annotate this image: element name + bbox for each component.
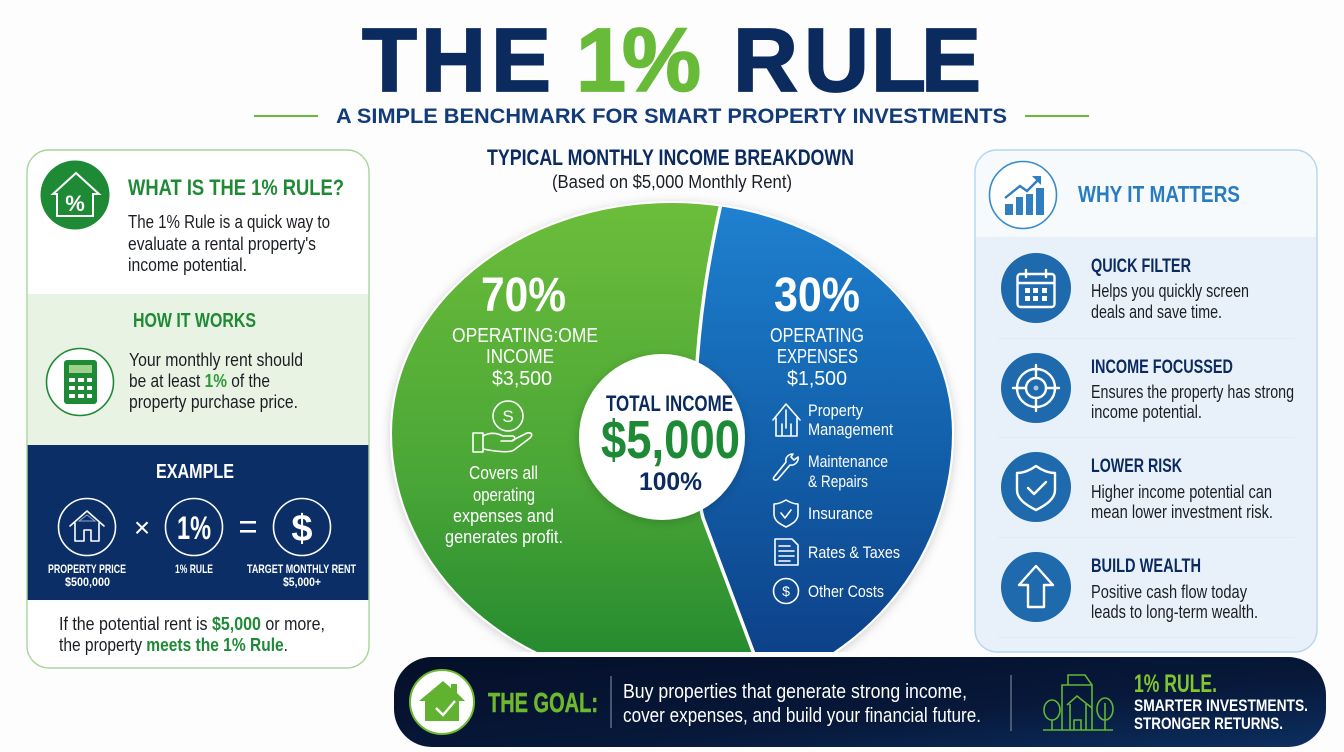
item: quick filter: deals and save time. [1091,302,1222,322]
segment labels: 30% [770,269,864,390]
segment labels: 70%: INCOME [486,346,554,368]
text: how it works: property purchase price. [129,392,298,412]
title: 1 [576,11,626,111]
icon: calculator [46,348,114,416]
icon: hand with coin: S [502,407,514,426]
item: income focussed [1001,353,1294,423]
segment labels: 70% [452,269,598,390]
icon: house with percent [40,160,110,230]
expense: maintenance and repairs: & Repairs [808,472,868,491]
panel: why it matters [975,150,1317,652]
label: target monthly rent [247,564,356,589]
text: conclusion: the property meets the 1% Rule. [59,635,288,655]
text: tagline [1134,670,1308,733]
icon: house with percent: % [65,191,85,216]
title: RULE [733,11,981,111]
icon: dollar: $ [291,508,313,550]
chart: income pie [386,198,958,652]
label: target monthly rent: $5,000+ [283,577,321,589]
label: target monthly rent: TARGET MONTHLY RENT [247,564,356,576]
segment labels: 30%: 30% [774,269,860,322]
item: quick filter [1001,253,1249,323]
text: tagline: 1% RULE. [1134,670,1217,698]
expense: property management: Property [808,401,863,420]
heading: example: EXAMPLE [156,461,234,483]
heading: why it matters: WHY IT MATTERS [1078,181,1240,207]
text: covers expenses: generates profit. [445,527,563,547]
heading: the goal: THE GOAL: [488,687,598,718]
label: property price: PROPERTY PRICE [48,564,126,576]
text: how it works: be at least 1% of the [129,371,270,391]
segment labels: 70%: OPERATING:OME [452,325,598,347]
icon: growth chart [990,162,1056,228]
title: THE [362,11,551,111]
segment labels: 30%: $1,500 [787,368,847,390]
item: build wealth: Positive cash flow today [1091,582,1247,602]
centre circle [579,354,745,520]
item: build wealth [1001,552,1258,622]
expense: other costs: Other Costs [808,582,884,601]
text: tagline: STRONGER RETURNS. [1134,714,1283,733]
centre circle: 100% [639,468,702,496]
label: property price: $500,000 [65,577,110,589]
label: property price [48,564,126,589]
icon: dollar [274,498,330,556]
expense: property management [773,401,893,439]
text: covers expenses: Covers all [469,463,538,483]
segment labels: 30%: OPERATING [770,325,864,347]
text: how it works: Your monthly rent should [129,350,303,370]
heading: how it works: HOW IT WORKS [133,310,256,332]
item: quick filter: QUICK FILTER [1091,256,1191,277]
item: build wealth: leads to long-term wealth. [1091,602,1258,622]
banner: the goal [394,657,1326,747]
expense: maintenance and repairs: Maintenance [808,452,888,471]
expense: property management: Management [808,420,893,439]
text: definition: The 1% Rule is a quick way to [128,212,330,232]
item: income focussed: income potential. [1091,402,1202,422]
text: covers expenses: expenses and [453,506,554,526]
heading: income breakdown: (Based on $5,000 Monthly Rent) [552,172,792,192]
text: goal statement: cover expenses, and build your financial future. [623,705,981,727]
heading: income breakdown: TYPICAL MONTHLY INCOME BREAKDOWN [487,145,854,170]
expense: rates and taxes [775,539,900,565]
subtitle: A SIMPLE BENCHMARK FOR SMART PROPERTY INVESTMENTS [336,104,1007,128]
expense: other costs: $ [782,583,790,599]
expense: other costs [774,578,884,604]
panel: what is the 1% rule [27,150,369,668]
text: goal statement: Buy properties that generate strong income, [623,681,967,703]
expense: rates and taxes: Rates & Taxes [808,543,900,562]
centre circle: $5,000 [601,410,740,470]
text: tagline: SMARTER INVESTMENTS. [1134,696,1308,715]
icon: 1% rule [166,498,222,556]
icon: 1% rule: 1% [177,510,211,546]
title [362,11,981,111]
operator: equals [240,521,256,533]
text: covers expenses: operating [473,485,535,505]
text: definition: income potential. [128,255,247,275]
text: definition [128,212,330,275]
segment labels: 70%: 70% [481,269,566,322]
expense: insurance [774,500,873,527]
item: lower risk: mean lower investment risk. [1091,502,1273,522]
text: how it works [129,350,303,412]
text: definition: evaluate a rental property's [128,234,316,254]
item: lower risk: LOWER RISK [1091,456,1182,477]
operator: times: × [134,512,150,543]
heading: what is the 1% rule: WHAT IS THE 1% RULE? [128,175,344,200]
segment labels: 70%: $3,500 [492,368,552,390]
expense: maintenance and repairs [773,452,888,491]
segment labels: 30%: EXPENSES [777,346,858,368]
text: conclusion: If the potential rent is $5,000 or more, [59,614,325,634]
item: lower risk [1001,452,1273,522]
item: lower risk: Higher income potential can [1091,482,1272,502]
item: build wealth: BUILD WEALTH [1091,556,1201,577]
icon: property price [58,498,116,556]
title: % [622,11,701,111]
icon: building and trees [1043,675,1113,730]
item: income focussed: INCOME FOCUSSED [1091,357,1233,378]
icon: house with check [410,670,474,734]
item: quick filter: Helps you quickly screen [1091,281,1249,301]
expense: insurance: Insurance [808,504,873,523]
heading: income breakdown [487,145,854,192]
icon: hand with coin [473,401,532,452]
label: 1% rule: 1% RULE [175,564,213,576]
centre circle: TOTAL INCOME [606,391,733,416]
text: covers expenses [445,463,563,547]
text: conclusion [59,614,325,655]
item: income focussed: Ensures the property has strong [1091,382,1294,402]
text: goal statement [623,681,981,727]
